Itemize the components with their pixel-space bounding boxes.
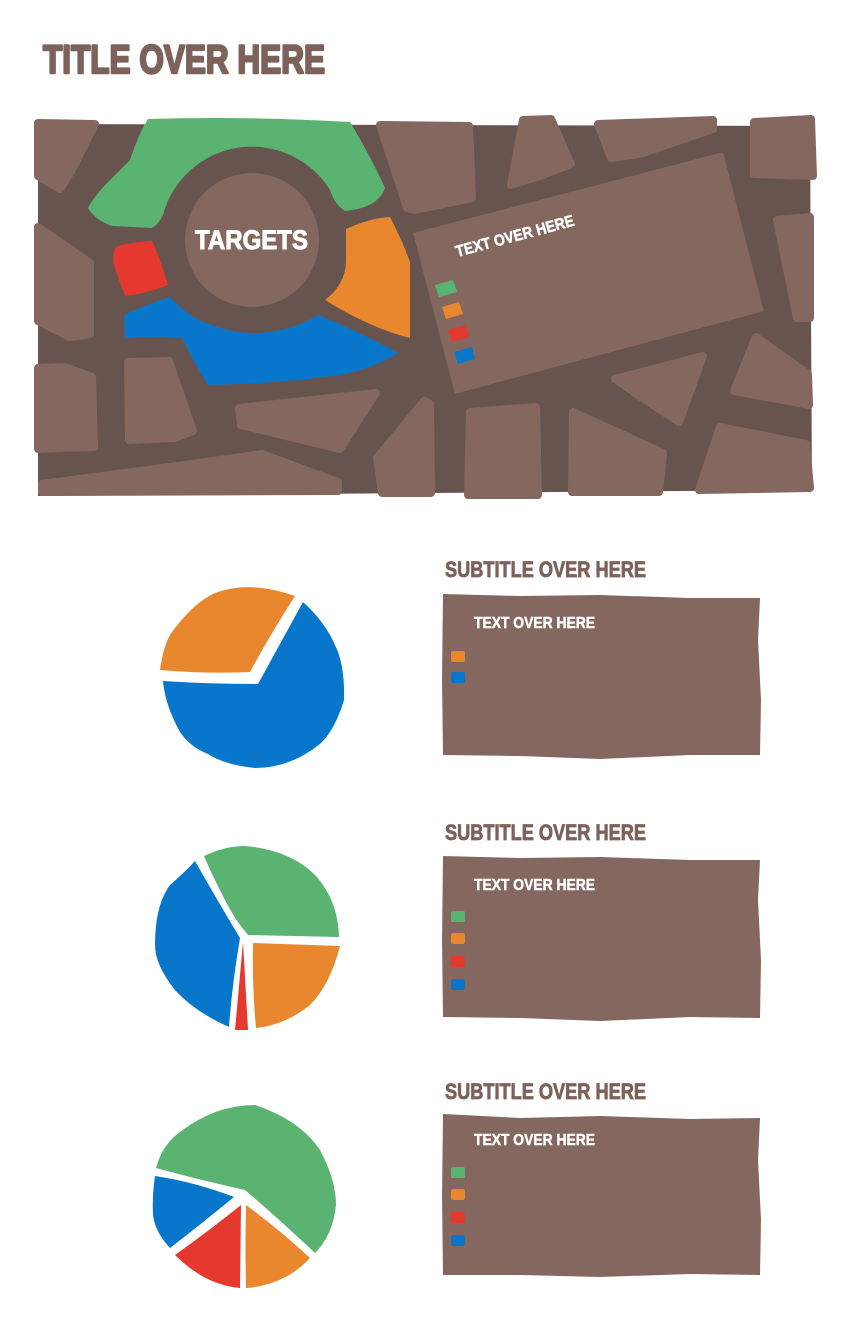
pie chart 3	[153, 1105, 336, 1288]
legend swatches	[451, 1167, 465, 1178]
map blocks	[38, 119, 813, 495]
map background	[38, 124, 812, 496]
blue slice	[153, 1176, 234, 1248]
legend swatches	[451, 911, 465, 922]
blue slice	[163, 602, 344, 768]
blue segment	[124, 297, 398, 385]
blue slice	[155, 861, 240, 1027]
panel heading: TEXT OVER HERE	[454, 213, 576, 261]
panel box	[442, 1114, 761, 1277]
red slice	[175, 1205, 241, 1288]
legend swatches	[451, 651, 465, 662]
subtitle 3: SUBTITLE OVER HERE	[445, 1079, 646, 1104]
panel box	[442, 594, 761, 759]
title: TITLE OVER HERE	[43, 38, 325, 82]
orange segment	[325, 217, 410, 338]
legend swatches	[435, 280, 475, 364]
panel 3	[442, 1114, 761, 1277]
panel 2	[442, 856, 761, 1021]
orange slice	[253, 943, 340, 1028]
subtitle 2: SUBTITLE OVER HERE	[445, 820, 646, 845]
orange slice	[246, 1205, 310, 1288]
panel box	[442, 856, 761, 1021]
green slice	[204, 846, 339, 937]
targets label: TARGETS	[195, 225, 308, 255]
pie chart 2	[155, 846, 340, 1030]
green segment	[88, 118, 385, 228]
green slice	[156, 1105, 336, 1253]
panel heading: TEXT OVER HERE	[474, 615, 595, 632]
panel: map	[38, 118, 813, 496]
panel heading: TEXT OVER HERE	[474, 877, 595, 894]
targets circle	[185, 173, 319, 307]
pie chart 1	[160, 587, 344, 768]
text panel	[415, 154, 762, 392]
red segment	[113, 241, 168, 296]
orange slice	[160, 587, 295, 673]
subtitle 1: SUBTITLE OVER HERE	[445, 557, 646, 582]
panel 1	[442, 594, 761, 759]
panel heading: TEXT OVER HERE	[474, 1132, 595, 1149]
red slice	[235, 942, 248, 1030]
